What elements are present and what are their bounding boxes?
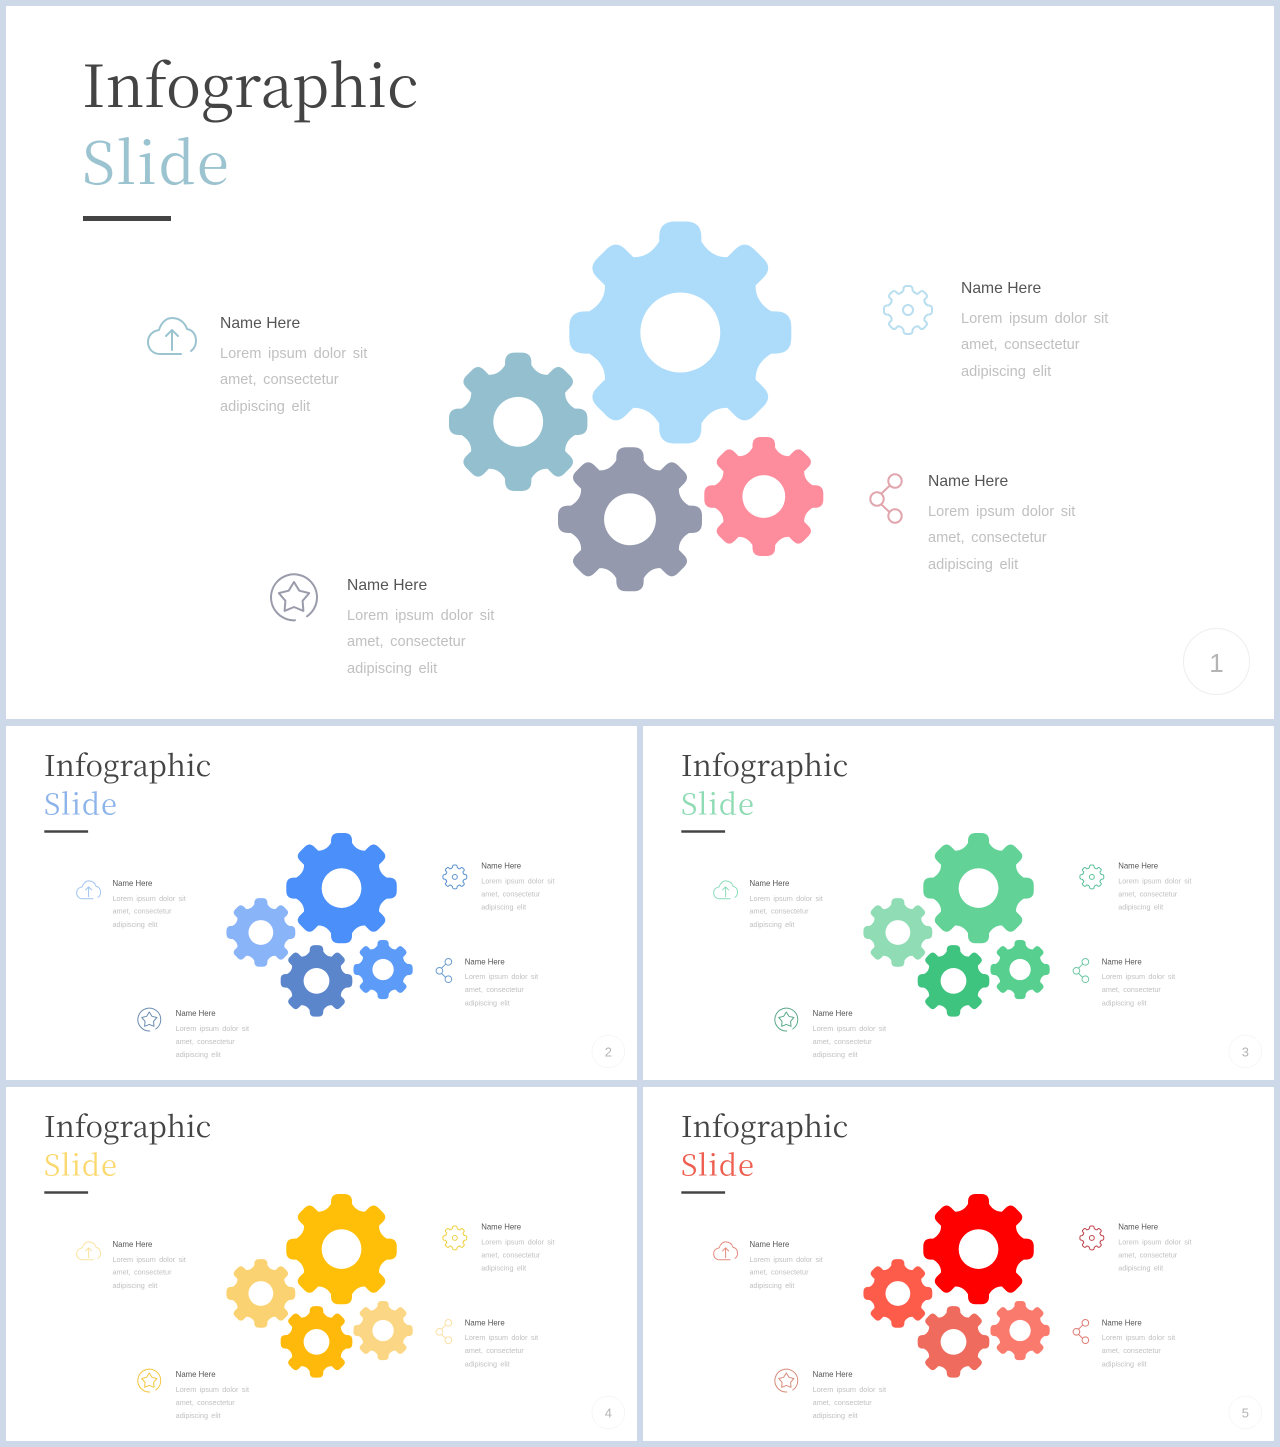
heading: Infographic: Infographic	[44, 1104, 211, 1146]
text block: top right: Lorem ipsum dolor sit	[481, 877, 555, 885]
text block: lower right: amet, consectetur	[1102, 1347, 1161, 1355]
text block: top right: Lorem ipsum dolor sit	[961, 311, 1108, 327]
text block: top left: Name Here	[749, 879, 789, 888]
icon: cog outline	[883, 285, 933, 335]
text block: lower right	[465, 1319, 538, 1368]
icon: star badge	[137, 1368, 162, 1392]
icon: share nodes	[1072, 1318, 1090, 1344]
right gear	[704, 437, 823, 556]
text block: lower right: amet, consectetur	[1102, 986, 1161, 994]
text block: top left: adipiscing elit	[749, 1282, 794, 1290]
text block: top right: amet, consectetur	[481, 890, 540, 898]
text block: top right: Lorem ipsum dolor sit	[1118, 1238, 1192, 1246]
text block: lower right: Lorem ipsum dolor sit	[1102, 973, 1175, 981]
text block: top right: adipiscing elit	[1118, 1265, 1163, 1272]
text block: top right: Lorem ipsum dolor sit	[481, 1238, 555, 1246]
title underline	[82, 216, 170, 221]
text block: bottom: Lorem ipsum dolor sit	[813, 1386, 886, 1394]
icon: cloud upload	[76, 1241, 101, 1260]
icon: cog outline	[1079, 864, 1104, 890]
heading: Slide: Slide	[681, 1142, 755, 1184]
text block: top right: adipiscing elit	[481, 904, 526, 911]
icon: cloud upload	[147, 317, 197, 355]
text block: lower right: Lorem ipsum dolor sit	[928, 504, 1075, 520]
text block: bottom: Name Here	[347, 577, 427, 594]
text block: bottom	[813, 1010, 886, 1059]
text block: lower right: Name Here	[465, 1319, 505, 1327]
icon: cloud upload	[713, 880, 738, 900]
icon: share nodes	[1072, 958, 1090, 983]
bottom gear	[558, 447, 702, 591]
text block: top right: Name Here	[1118, 862, 1158, 870]
icon: cog outline	[1079, 1226, 1104, 1250]
text block: top right: Lorem ipsum dolor sit	[1118, 877, 1192, 885]
bottom gear	[918, 945, 989, 1017]
text block: bottom: Lorem ipsum dolor sit	[176, 1025, 249, 1033]
text block: top right	[961, 280, 1108, 380]
text block: top left: Lorem ipsum dolor sit	[749, 1256, 823, 1264]
heading: Infographic: Infographic	[681, 743, 848, 785]
text block: top left: amet, consectetur	[112, 908, 172, 916]
text block: top right: amet, consectetur	[961, 337, 1080, 353]
text block: lower right: amet, consectetur	[465, 986, 524, 994]
text block: lower right: Name Here	[928, 473, 1008, 490]
heading: Infographic: Infographic	[681, 1104, 848, 1146]
left gear	[226, 898, 295, 967]
page number	[592, 1396, 625, 1429]
text block: top left: amet, consectetur	[749, 908, 809, 916]
page number	[1229, 1035, 1262, 1068]
text block: bottom: amet, consectetur	[813, 1399, 872, 1407]
large gear	[286, 833, 397, 943]
text block: top right: adipiscing elit	[961, 364, 1051, 380]
page number: 3	[1242, 1045, 1249, 1060]
text block: lower right: Name Here	[1102, 1319, 1142, 1327]
text block: bottom: amet, consectetur	[813, 1038, 872, 1046]
text block: bottom: adipiscing elit	[813, 1051, 858, 1059]
page number: 5	[1242, 1406, 1249, 1421]
text block: top left: Lorem ipsum dolor sit	[112, 895, 186, 903]
text block: top left: Lorem ipsum dolor sit	[220, 346, 367, 362]
text block: top right	[481, 1223, 555, 1272]
text block: top left: Name Here	[112, 1240, 152, 1249]
heading: Slide: Slide	[44, 781, 118, 823]
right gear	[353, 940, 413, 999]
text block: bottom: adipiscing elit	[813, 1412, 858, 1420]
text block: lower right: amet, consectetur	[928, 530, 1047, 546]
page number: 4	[605, 1406, 612, 1421]
left gear	[226, 1259, 295, 1328]
text block: bottom: adipiscing elit	[347, 661, 437, 677]
text block: top right: amet, consectetur	[1118, 890, 1177, 898]
text block: top right	[481, 862, 555, 911]
icon: star badge	[774, 1008, 798, 1032]
large gear	[923, 833, 1034, 943]
text block: top left: adipiscing elit	[749, 921, 794, 929]
panel: slide 4 yellow	[6, 1087, 637, 1441]
text block: lower right: adipiscing elit	[1102, 999, 1147, 1007]
icon: share nodes	[436, 958, 452, 983]
icon: star badge	[774, 1368, 799, 1394]
text block: lower right: adipiscing elit	[465, 1360, 510, 1368]
text block: top right: amet, consectetur	[1118, 1251, 1177, 1259]
text block: lower right: Name Here	[1102, 958, 1142, 966]
text block: lower right: adipiscing elit	[1102, 1360, 1147, 1368]
page number: 2	[605, 1045, 612, 1060]
text block: lower right	[1102, 958, 1176, 1007]
text block: lower right: Name Here	[465, 958, 505, 966]
page number	[592, 1035, 625, 1068]
text block: bottom: Name Here	[176, 1371, 216, 1379]
text block: top left: adipiscing elit	[112, 921, 157, 929]
large gear	[923, 1194, 1034, 1304]
panel: slide 2 blue	[6, 726, 637, 1080]
page number	[1229, 1396, 1262, 1429]
heading: Slide: Slide	[681, 781, 755, 823]
text block: top right: adipiscing elit	[481, 1265, 526, 1272]
heading: Infographic: Infographic	[82, 40, 419, 124]
text block: lower right: adipiscing elit	[928, 557, 1018, 573]
text block: top left: Name Here	[112, 879, 152, 888]
text block: top right: amet, consectetur	[481, 1251, 540, 1259]
text block: top left: amet, consectetur	[220, 372, 339, 388]
text block: bottom: adipiscing elit	[176, 1412, 221, 1420]
text block: bottom: Name Here	[176, 1010, 216, 1018]
text block: top left: adipiscing elit	[112, 1282, 157, 1290]
bottom gear	[281, 1306, 352, 1378]
icon: share nodes	[436, 1319, 452, 1344]
title underline	[44, 830, 88, 833]
page number: 1	[1209, 648, 1224, 678]
left gear	[863, 898, 932, 967]
text block: top left: Name Here	[749, 1240, 789, 1249]
text block: top right	[1118, 862, 1192, 911]
large gear	[286, 1194, 397, 1304]
gear cluster	[449, 222, 824, 592]
text block: top left: amet, consectetur	[112, 1269, 172, 1277]
text block: bottom: Lorem ipsum dolor sit	[176, 1386, 249, 1394]
heading: Slide: Slide	[82, 117, 231, 201]
right gear	[990, 1301, 1050, 1360]
text block: lower right: Lorem ipsum dolor sit	[1102, 1334, 1175, 1342]
text block: lower right: Lorem ipsum dolor sit	[465, 1334, 538, 1342]
left gear	[449, 353, 587, 491]
left gear	[863, 1259, 932, 1328]
text block: top left	[112, 1240, 186, 1290]
right gear	[990, 940, 1050, 999]
page number	[1183, 628, 1250, 695]
panel: slide 3 green	[643, 726, 1274, 1080]
icon: share nodes	[869, 473, 903, 524]
text block: bottom: adipiscing elit	[176, 1051, 221, 1059]
text block: top right: Name Here	[961, 280, 1041, 297]
text block: top right: Name Here	[481, 1223, 521, 1231]
text block: bottom: amet, consectetur	[347, 634, 466, 650]
text block: bottom	[347, 577, 494, 677]
text block: bottom	[176, 1371, 249, 1420]
text block: lower right: adipiscing elit	[465, 999, 510, 1007]
text block: top left	[220, 315, 368, 415]
text block: lower right	[465, 958, 538, 1007]
gear cluster	[863, 1194, 1050, 1378]
text block: lower right	[928, 473, 1076, 573]
icon: star badge	[270, 573, 318, 622]
icon: cloud upload	[76, 880, 101, 900]
text block: top right	[1118, 1222, 1218, 1275]
gear cluster	[226, 1194, 413, 1378]
text block: top left: adipiscing elit	[220, 399, 310, 415]
title underline	[681, 830, 725, 833]
text block: top right: adipiscing elit	[1118, 904, 1163, 911]
gear cluster	[863, 833, 1050, 1017]
text block: bottom: Name Here	[813, 1371, 853, 1379]
panel: slide 5 red	[643, 1087, 1274, 1441]
title underline	[44, 1191, 88, 1194]
title underline	[681, 1191, 725, 1194]
right gear	[353, 1301, 413, 1360]
icon: cog outline	[442, 864, 468, 890]
text block: bottom	[813, 1369, 912, 1423]
icon: cloud upload	[713, 1241, 738, 1260]
text block: lower right: amet, consectetur	[465, 1347, 524, 1355]
text block: top right: Name Here	[1118, 1223, 1158, 1231]
text block: top left	[749, 1240, 823, 1290]
icon: star badge	[137, 1008, 162, 1032]
heading: Slide: Slide	[44, 1142, 118, 1184]
text block: bottom: Lorem ipsum dolor sit	[813, 1025, 886, 1033]
text block: bottom: Name Here	[813, 1010, 853, 1018]
text block: bottom: Lorem ipsum dolor sit	[347, 608, 494, 624]
text block: top left	[749, 879, 823, 929]
text block: top left: Lorem ipsum dolor sit	[749, 895, 823, 903]
text block: top right: Name Here	[481, 862, 521, 870]
text block: bottom	[176, 1010, 249, 1059]
text block: bottom: amet, consectetur	[176, 1038, 235, 1046]
text block: top left: amet, consectetur	[749, 1269, 809, 1277]
icon: cog outline	[442, 1226, 468, 1250]
panel: slide 1	[6, 6, 1274, 719]
heading: Infographic: Infographic	[44, 743, 211, 785]
text block: lower right	[1102, 1317, 1201, 1371]
bottom gear	[918, 1306, 989, 1378]
text block: top left: Name Here	[220, 315, 300, 332]
large gear	[569, 222, 791, 444]
gear cluster	[226, 833, 413, 1017]
bottom gear	[281, 945, 352, 1017]
text block: bottom: amet, consectetur	[176, 1399, 235, 1407]
text block: lower right: Lorem ipsum dolor sit	[465, 973, 538, 981]
text block: top left: Lorem ipsum dolor sit	[112, 1256, 186, 1264]
text block: top left	[112, 879, 186, 929]
